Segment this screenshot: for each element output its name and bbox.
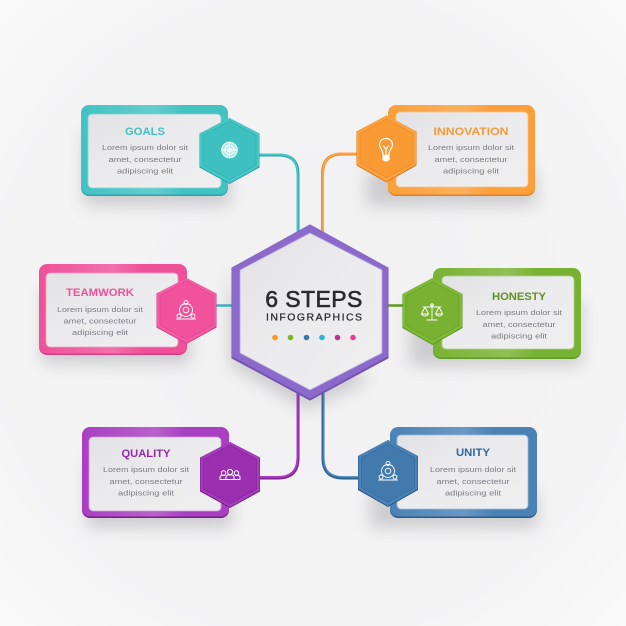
card face: [88, 114, 221, 188]
panel: innovation: [356, 105, 535, 196]
panel: center hexagon: [232, 225, 388, 400]
card face: [397, 435, 528, 509]
connector: goals: [258, 154, 298, 235]
connector: unity: [323, 390, 360, 478]
panel: teamwork: [39, 264, 216, 355]
body text: Lorem ipsum dolor sit: [430, 465, 517, 474]
icon: target: [222, 142, 238, 158]
body text: Lorem ipsum dolor sit: [102, 143, 189, 152]
body text: Lorem ipsum dolor sit: [103, 465, 190, 474]
card face: [442, 276, 574, 349]
card frame: [82, 427, 229, 518]
hexagon badge: [358, 440, 418, 507]
body text: adipiscing elit: [491, 332, 548, 340]
card frame: [388, 105, 535, 196]
hexagon badge: [200, 118, 260, 184]
hexagon badge: [200, 442, 260, 508]
connector: teamwork: [214, 304, 236, 307]
hexagon frame: [232, 225, 388, 400]
body text: Lorem ipsum dolor sit: [476, 308, 563, 317]
heading: QUALITY: [122, 448, 171, 460]
heading: UNITY: [456, 447, 491, 459]
title: 6 STEPS: [265, 286, 363, 312]
body text: amet, consectetur: [434, 155, 508, 164]
panel: unity: [358, 427, 537, 518]
hexagon badge: [156, 278, 216, 344]
body text: amet, consectetur: [108, 155, 182, 164]
body text: [476, 308, 563, 340]
card frame: [81, 105, 228, 196]
panel: quality: [82, 427, 260, 518]
card frame: [390, 427, 537, 518]
colored dots: [272, 335, 356, 340]
card face: [396, 112, 528, 187]
heading: INNOVATION: [434, 126, 509, 138]
body text: amet, consectetur: [64, 316, 137, 326]
hexagon face: [240, 233, 382, 390]
icon: teamwork circle: [176, 300, 196, 319]
body text: Lorem ipsum dolor sit: [428, 143, 515, 152]
card face: [89, 437, 221, 511]
icon: light bulb: [380, 138, 392, 161]
body text: [103, 465, 190, 498]
body text: [430, 465, 517, 498]
icon: people: [220, 469, 240, 480]
subtitle: INFOGRAPHICS: [266, 312, 362, 324]
card frame: [433, 268, 581, 359]
shadows: [42, 130, 582, 528]
body text: amet, consectetur: [110, 477, 183, 486]
heading: HONESTY: [492, 291, 547, 303]
body text: adipiscing elit: [72, 328, 129, 337]
body text: amet, consectetur: [436, 477, 510, 486]
connector: honesty: [385, 304, 405, 307]
icon: unity circle: [378, 462, 398, 480]
icon: scales: [422, 304, 442, 320]
body text: [57, 305, 144, 337]
heading: TEAMWORK: [66, 287, 134, 299]
body text: amet, consectetur: [482, 320, 556, 329]
body text: adipiscing elit: [118, 488, 175, 498]
card frame: [39, 264, 187, 355]
hexagon badge: [402, 278, 462, 345]
connector: innovation: [322, 154, 358, 235]
body text: adipiscing elit: [445, 488, 502, 498]
body text: adipiscing elit: [117, 166, 174, 176]
body text: [102, 143, 189, 176]
card face: [46, 273, 178, 347]
panel: goals: [81, 105, 260, 196]
body text: adipiscing elit: [443, 166, 500, 176]
heading: GOALS: [125, 126, 165, 138]
panel: honesty: [402, 268, 581, 359]
connector: quality: [258, 390, 298, 478]
body text: Lorem ipsum dolor sit: [57, 305, 144, 314]
hexagon badge: [356, 116, 416, 182]
body text: [428, 143, 515, 176]
